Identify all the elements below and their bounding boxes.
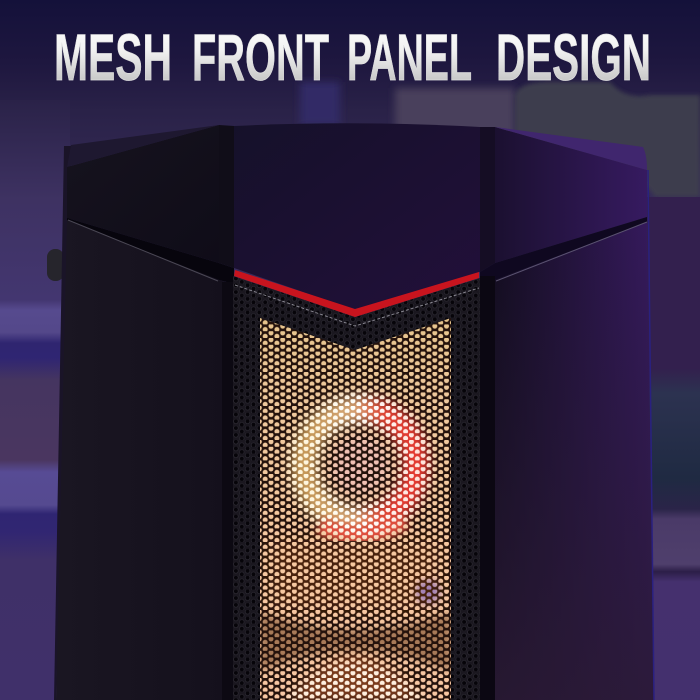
left upper panel xyxy=(67,125,219,263)
bright holes xyxy=(260,318,451,700)
title: MESH xyxy=(54,20,172,94)
mesh front panel xyxy=(233,276,480,700)
purple reflection xyxy=(416,580,440,604)
side knob xyxy=(47,249,64,281)
side strips beside mesh xyxy=(222,282,233,700)
lower fan highlight xyxy=(285,662,425,700)
metallic edge line xyxy=(235,285,479,326)
PC case xyxy=(47,123,654,700)
ring highlight seen through holes xyxy=(304,409,416,521)
left pillar xyxy=(219,125,234,268)
title xyxy=(54,20,651,94)
right pillar xyxy=(480,127,495,272)
centre top panel xyxy=(234,123,480,310)
title: FRONT xyxy=(192,20,329,94)
right lower panel xyxy=(480,170,654,700)
dark mesh frame xyxy=(233,276,480,700)
dim gap between fans xyxy=(260,612,451,672)
right upper panel xyxy=(495,127,647,263)
red chevron accent xyxy=(234,270,479,317)
metal lit by fans xyxy=(260,318,451,700)
left lower panel xyxy=(56,218,234,700)
rear edge of case xyxy=(54,146,71,700)
title: PANEL xyxy=(347,20,472,94)
lit area behind mesh xyxy=(260,318,451,700)
